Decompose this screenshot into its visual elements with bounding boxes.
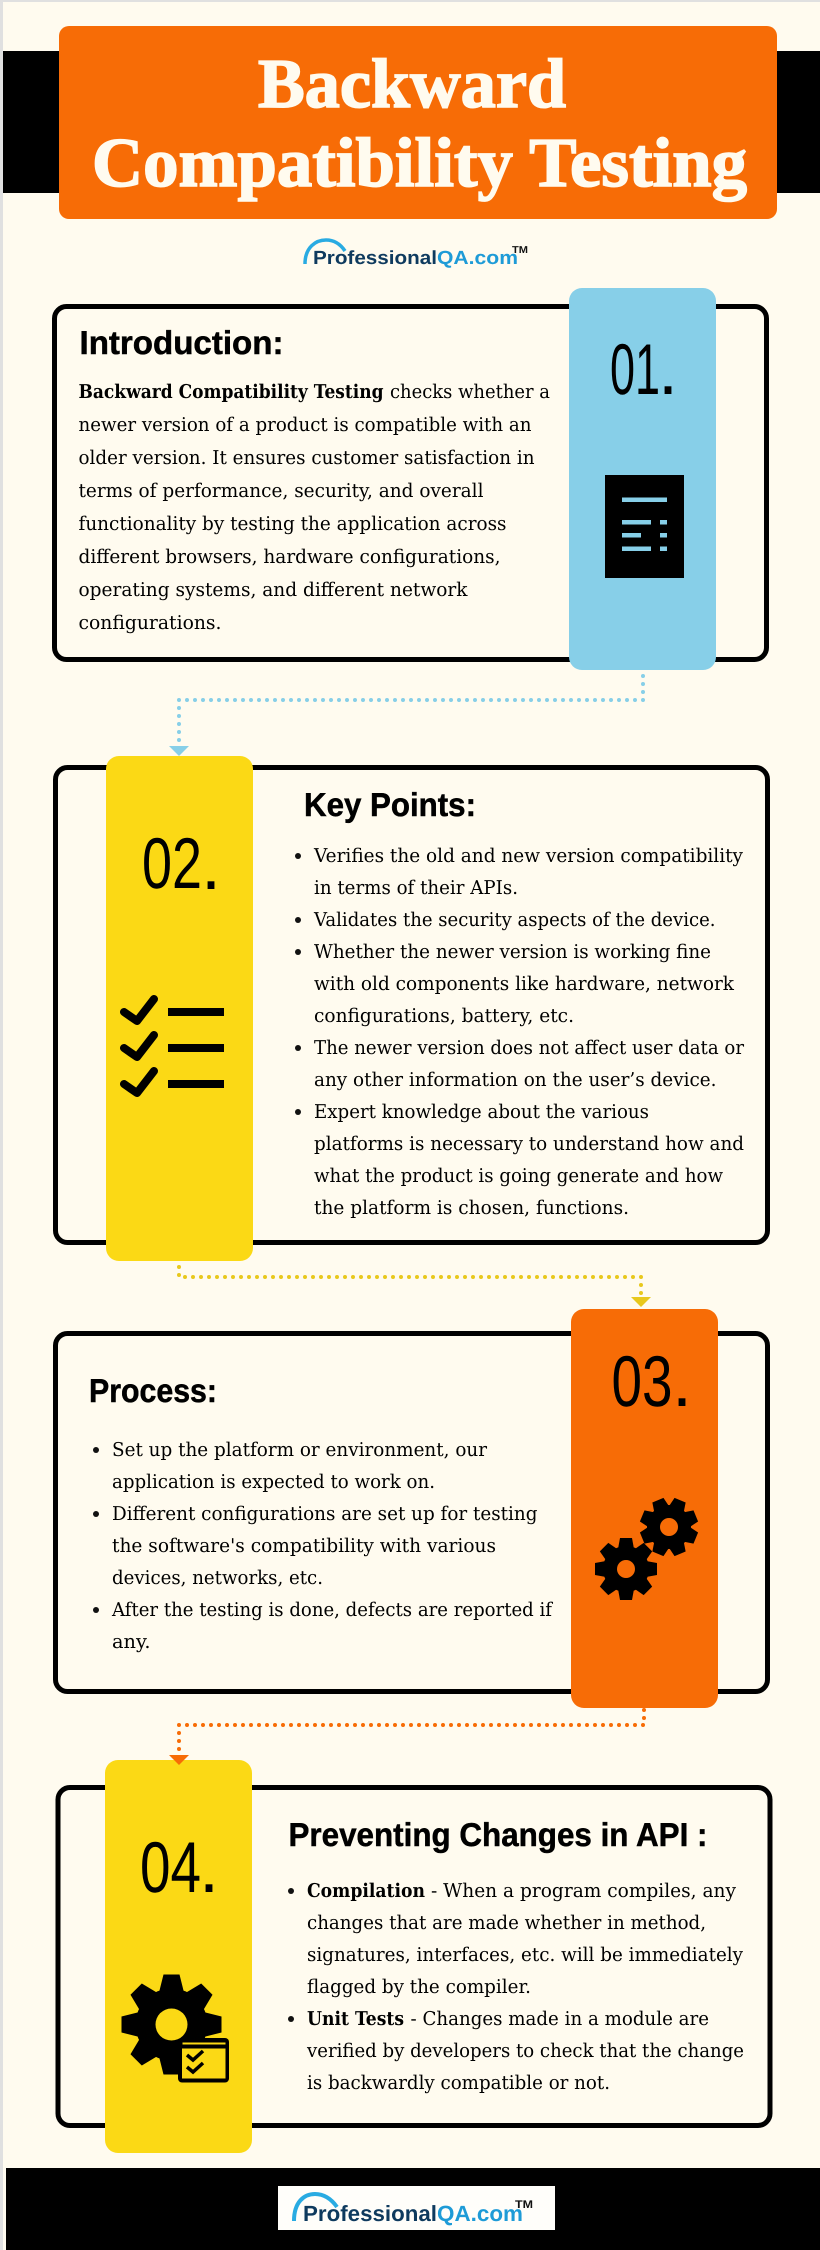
bullet list: process	[93, 1439, 554, 1653]
bullet list: key points: Whether the newer version is working fine	[314, 941, 711, 963]
bullet list: API changes: Unit Tests	[307, 2008, 404, 2030]
header band and title	[3, 26, 820, 219]
number 04: 04	[140, 1828, 201, 1908]
text block: introduction body: Backward Compatibility Testing	[78, 381, 384, 403]
bullet list: API changes: signatures, interfaces, etc. will be immediately	[307, 1944, 743, 1966]
bullet list: key points: Validates the security aspects of the device.	[313, 909, 716, 931]
bullet list: API changes: - When a program compiles, any	[431, 1880, 736, 1902]
bullet list: key points: with old components like hardware, network	[314, 973, 734, 995]
arrow: connector 02 to 03	[179, 1262, 651, 1307]
logo: ProfessionalQA.com	[305, 240, 528, 269]
text block: introduction body	[78, 381, 550, 634]
bullet list: key points: in terms of their APIs.	[314, 877, 518, 899]
bullet list: API changes: verified by developers to check that the change	[306, 2040, 744, 2062]
icon: checklist	[124, 999, 224, 1093]
bullet list: API changes: Compilation	[307, 1880, 425, 1902]
text block: introduction body: terms of performance, security, and overall	[78, 480, 484, 502]
heading: Key Points: Key Points:	[304, 786, 476, 823]
panel: process	[56, 1309, 768, 1708]
bullet list: API changes: flagged by the compiler.	[307, 1976, 531, 1998]
bullet list: process: devices, networks, etc.	[112, 1567, 323, 1589]
number 03: .	[672, 1342, 692, 1422]
icon: gear with checklist window	[122, 1974, 229, 2082]
text block: introduction body: operating systems, and different network	[78, 579, 468, 601]
logo: ProfessionalQA.com: QA.com	[437, 248, 518, 269]
bullet list: process: application is expected to work on.	[112, 1471, 435, 1493]
footer logo: ProfessionalQA.com: TM	[515, 2199, 533, 2211]
card: 04 yellow	[105, 1760, 252, 2153]
title: Compatibility Testing	[92, 125, 747, 202]
logo: ProfessionalQA.com: TM	[512, 245, 528, 256]
arrow: connector 03 to 04	[169, 1709, 644, 1765]
bullet list: key points: platforms is necessary to understand how and	[314, 1133, 744, 1155]
bullet list: API changes: changes that are made whether in method,	[307, 1912, 706, 1934]
bullet list: key points: The newer version does not affect user data or	[314, 1037, 745, 1059]
icon: document	[605, 475, 684, 578]
number 03: 03	[612, 1342, 672, 1422]
text block: introduction body: different browsers, hardware configurations,	[78, 546, 500, 568]
bullet list: key points	[295, 845, 745, 1219]
bullet list: key points: Expert knowledge about the various	[314, 1101, 649, 1123]
text block: introduction body: older version. It ensures customer satisfaction in	[78, 447, 534, 469]
bullet list: API changes: is backwardly compatible or not.	[307, 2072, 610, 2094]
icon: gears	[595, 1489, 707, 1600]
card: 02 yellow	[106, 756, 253, 1261]
number 02: .	[201, 825, 221, 905]
panel: key points	[56, 756, 768, 1261]
footer band	[6, 2168, 820, 2250]
card: 03 orange	[571, 1309, 718, 1708]
number 01: .	[658, 330, 678, 410]
title	[92, 46, 747, 202]
heading: Process: Process:	[89, 1372, 217, 1409]
number 04: .	[199, 1828, 219, 1908]
number 02: 02	[142, 824, 202, 904]
logo: ProfessionalQA.com: Professional	[313, 248, 437, 269]
heading: Introduction: Introduction:	[80, 324, 284, 361]
bullet list: key points: configurations, battery, etc.	[314, 1005, 574, 1027]
bullet list: key points: Verifies the old and new version compatibility	[313, 845, 743, 867]
text block: introduction body: checks whether a	[390, 381, 550, 403]
bullet list: API changes: - Changes made in a module are	[410, 2008, 709, 2030]
text block: introduction body: newer version of a product is compatible with an	[78, 414, 532, 436]
panel: introduction	[54, 288, 766, 670]
panel: preventing changes in API	[58, 1760, 770, 2153]
bullet list: process: any.	[112, 1631, 150, 1653]
footer logo: ProfessionalQA.com: QA.com	[437, 2201, 523, 2226]
bullet list: process: Different configurations are set up for testing	[112, 1503, 538, 1525]
number 01: 01	[610, 330, 660, 410]
heading: Preventing Changes in API: Preventing Changes in API :	[288, 1816, 708, 1853]
footer logo: ProfessionalQA.com	[278, 2186, 555, 2230]
arrow: connector 01 to 02	[169, 668, 643, 756]
card: 01 blue	[569, 288, 716, 670]
bullet list: API changes	[288, 1880, 744, 2094]
bullet list: process: After the testing is done, defects are reported if	[111, 1599, 554, 1621]
footer logo: ProfessionalQA.com: Professional	[303, 2201, 437, 2226]
text block: introduction body: configurations.	[78, 612, 222, 634]
bullet list: key points: any other information on the user’s device.	[314, 1069, 716, 1091]
bullet list: key points: what the product is going generate and how	[314, 1165, 724, 1187]
bullet list: key points: the platform is chosen, functions.	[314, 1197, 629, 1219]
text block: introduction body: functionality by testing the application across	[78, 513, 506, 535]
bullet list: process: the software's compatibility with various	[112, 1535, 496, 1557]
bullet list: process: Set up the platform or environment, our	[112, 1439, 488, 1461]
title: Backward	[258, 46, 566, 123]
